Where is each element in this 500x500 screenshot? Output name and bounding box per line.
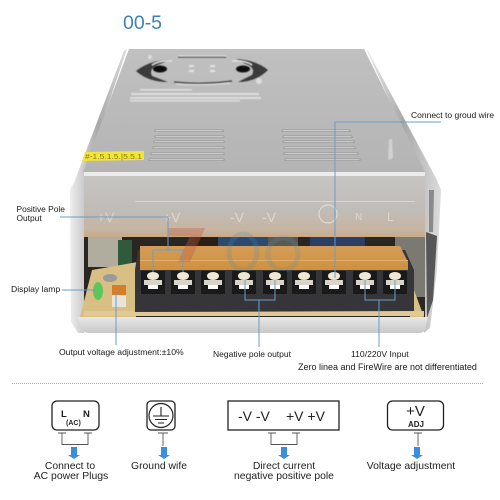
icon: DC terminals: -V -V xyxy=(238,408,271,424)
caption: AC plugs: AC power Plugs xyxy=(34,471,108,482)
label: positive pole output: Positive Pole xyxy=(16,204,65,214)
icon: DC terminals: +V +V xyxy=(286,408,326,424)
label: display lamp: Display lamp xyxy=(11,284,60,294)
caption: AC plugs: Connect to xyxy=(45,461,95,472)
callout lines xyxy=(60,122,441,347)
icon: voltage adjust: ADJ xyxy=(408,420,424,429)
terminal markings on front face: +V xyxy=(163,209,181,225)
terminal markings on front face: -V xyxy=(230,209,245,225)
bottom lip xyxy=(78,317,428,333)
title: 00-5 xyxy=(123,12,162,34)
icon: AC terminal: L xyxy=(61,409,67,420)
icon: AC terminal: (AC) xyxy=(66,420,81,427)
terminal markings on front face: L xyxy=(387,210,394,224)
dotted divider xyxy=(12,382,484,384)
label: connect to ground wire: Connect to groud wire xyxy=(411,110,494,120)
terminal markings on front face xyxy=(97,201,415,225)
power supply photo xyxy=(70,49,441,333)
icon: voltage adjust: +V xyxy=(406,403,425,420)
icon: voltage adjust xyxy=(388,401,444,459)
caption: ground: Ground wife xyxy=(131,461,187,472)
interior xyxy=(80,237,425,317)
cover vertical logo xyxy=(388,139,393,160)
label: positive pole output: Output xyxy=(16,213,42,223)
caption: DC poles: negative positive pole xyxy=(234,471,334,482)
label: zero line note: Zero linea and FireWire are not differentiated xyxy=(298,362,477,372)
label: input voltage: 110/220V Input xyxy=(351,349,409,359)
fan grille xyxy=(136,55,268,85)
screw terminals xyxy=(141,271,407,294)
spec text on cover xyxy=(130,89,261,102)
yellow warning label: #-1.5.1.5.|5.5.1 xyxy=(85,154,142,161)
terminal markings on front face: +V xyxy=(97,209,115,225)
left side wall xyxy=(70,49,127,333)
terminal markings on front face: N xyxy=(355,212,362,223)
front edge highlight xyxy=(84,172,425,177)
icon: DC terminals xyxy=(228,401,339,459)
left vent slots xyxy=(149,130,224,161)
label: negative pole output: Negative pole output xyxy=(213,349,292,359)
right side wall xyxy=(366,49,441,333)
caption: voltage adjustment: Voltage adjustment xyxy=(367,461,455,472)
front face xyxy=(84,176,425,238)
icon: ground xyxy=(147,401,175,459)
top cover xyxy=(83,49,425,172)
icon: AC terminal: N xyxy=(83,409,90,420)
icon: AC terminal xyxy=(52,401,99,459)
watermark xyxy=(168,228,205,262)
yellow warning label xyxy=(82,151,144,161)
trim potentiometer xyxy=(103,274,126,307)
terminal block xyxy=(135,228,414,312)
caption: DC poles: Direct current xyxy=(253,461,315,472)
terminal markings on front face: -V xyxy=(262,209,277,225)
right vent slots xyxy=(282,130,360,161)
label: output voltage adjustment: Output voltage adjustment:±10% xyxy=(59,347,184,357)
green display lamp xyxy=(93,282,103,300)
